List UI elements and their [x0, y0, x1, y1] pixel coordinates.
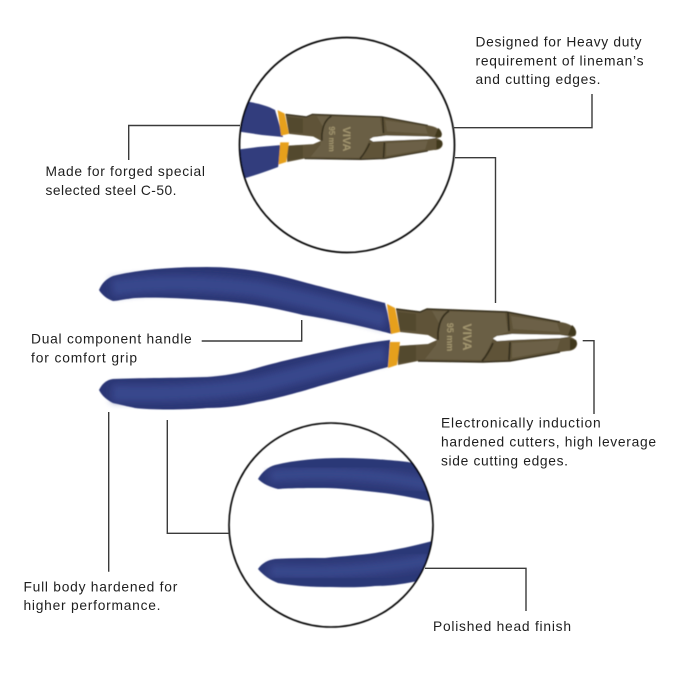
text: polished head finish: Polished head finish: [433, 619, 571, 634]
upper handle: [99, 267, 392, 334]
lower handle: [99, 340, 390, 410]
leader: polished head finish: [425, 568, 526, 611]
lower tip highlight: [270, 560, 430, 572]
text: induction hardened cutters: hardened cutters, high leverage: [441, 435, 656, 450]
text: heavy duty: [476, 34, 644, 87]
text: heavy duty: requirement of lineman’s: [476, 53, 644, 68]
embossed size: 95 mm: [445, 323, 455, 351]
text: heavy duty: and cutting edges.: [476, 72, 600, 87]
text: induction hardened cutters: [441, 416, 656, 469]
leader: handle tips to zoom circle: [167, 420, 229, 533]
leader: forged steel: [129, 126, 240, 160]
text: full body hardened: Full body hardened for: [24, 580, 178, 595]
text: induction hardened cutters: side cutting edges.: [441, 454, 568, 469]
circle outline: [240, 38, 454, 252]
text: forged steel: [46, 164, 205, 198]
leader: dual component handle: [202, 320, 302, 341]
lower handle highlight: [112, 354, 386, 393]
text: dual component handle: for comfort grip: [31, 351, 137, 366]
leader: induction hardened cutters: [583, 341, 594, 414]
embossed size on magnified head: 95 mm: [327, 126, 336, 152]
lower handle stub in zoom circle: [240, 144, 281, 179]
embossed brand: VIVA: [460, 323, 474, 351]
upper handle tip: [258, 458, 440, 505]
zoom circle: handle tips: [229, 423, 440, 627]
leader: head to zoom circle: [455, 158, 496, 303]
text: dual component handle: [31, 332, 192, 366]
text: heavy duty: Designed for Heavy duty: [476, 34, 642, 50]
upper handle stub in zoom circle: [240, 101, 284, 138]
text: full body hardened: higher performance.: [24, 598, 160, 613]
leader: heavy duty: [454, 94, 592, 128]
main pliers: [99, 267, 577, 410]
pliers head: [387, 304, 577, 368]
text: forged steel: selected steel C-50.: [46, 183, 176, 198]
illustration: pliers and zoom circles: [99, 38, 577, 627]
text: full body hardened: [24, 580, 178, 613]
leader: full body hardened: [108, 412, 110, 572]
upper handle highlight: [112, 284, 386, 320]
zoom circle: pliers head: [235, 38, 454, 252]
lower handle tip: [258, 539, 440, 587]
pliers head magnified: [278, 110, 443, 164]
circle outline: [229, 423, 433, 627]
text: forged steel: Made for forged special: [46, 164, 205, 179]
upper tip highlight: [270, 474, 430, 485]
text: induction hardened cutters: Electronically induction: [441, 416, 601, 431]
text: dual component handle: Dual component handle: [31, 332, 192, 346]
embossed brand on magnified head: VIVA: [340, 127, 352, 151]
